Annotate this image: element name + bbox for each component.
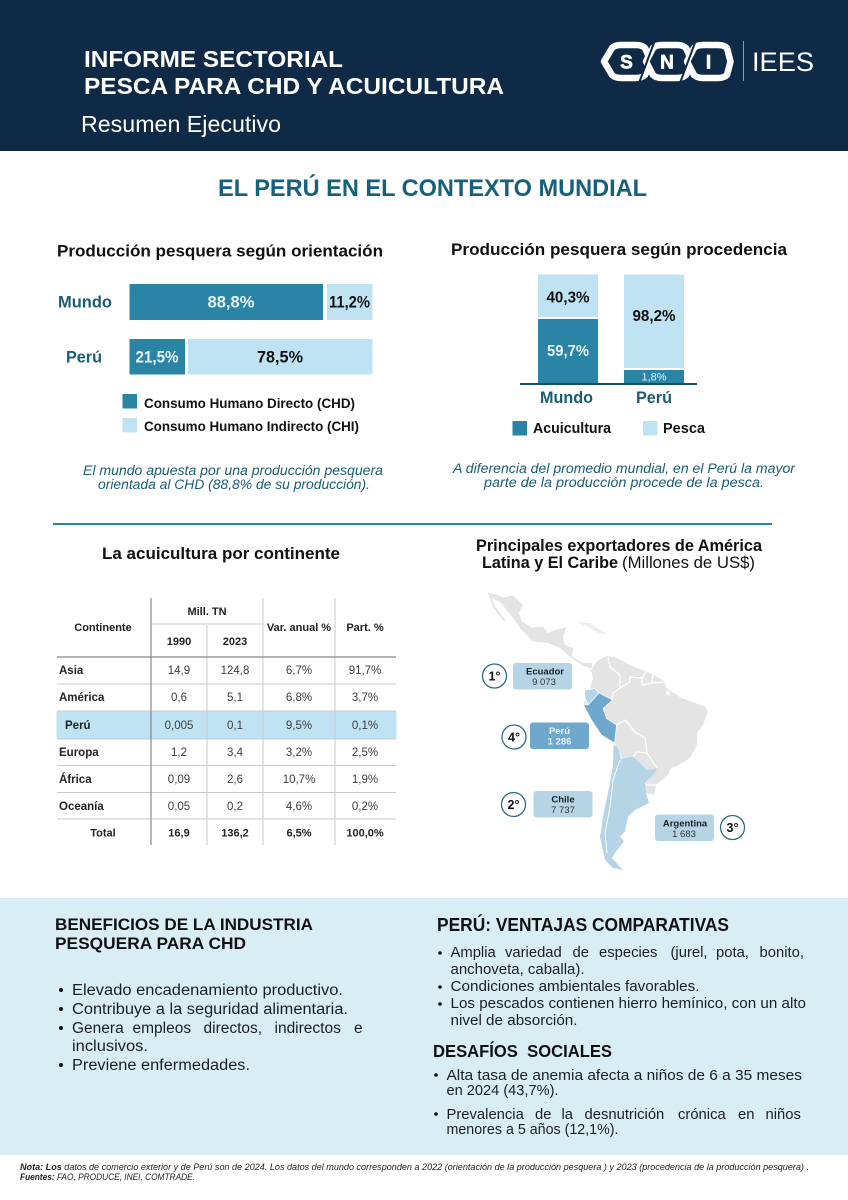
list: comparative advantages: Condiciones ambientales favorables.: [450, 979, 700, 995]
list: benefits: [59, 982, 363, 1074]
logo: SNI IEES: N: [660, 52, 674, 74]
stacked column chart: origin: Mundo: [540, 388, 593, 407]
table: aquaculture: 0,09: [168, 774, 190, 786]
logo: SNI IEES: S: [620, 52, 633, 74]
table: aquaculture: 100,0%: [346, 828, 384, 840]
bar chart: orientation: [58, 284, 372, 374]
map heading: (Millones de US$): [622, 553, 755, 572]
table: aquaculture: 16,9: [168, 828, 190, 840]
legend: origin: Pesca: [663, 421, 706, 437]
callout: Ecuador: Ecuador: [526, 666, 564, 678]
list: social challenges: en 2024 (43,7%).: [446, 1083, 558, 1099]
callout: Perú: [502, 722, 589, 749]
table: aquaculture: África: [59, 773, 92, 786]
list: benefits: Elevado encadenamiento productivo.: [72, 982, 343, 999]
table: aquaculture: Asia: [59, 665, 84, 677]
callout: Chile: 7 737: [551, 805, 575, 816]
legend: orientation: Consumo Humano Directo (CHD): [144, 395, 355, 411]
list: comparative advantages: pota,: [716, 945, 749, 961]
table: aquaculture: 2,5%: [352, 747, 378, 759]
panel: Latin American exporters: [476, 536, 763, 870]
list: social challenges: en: [738, 1107, 754, 1123]
callout: Argentina: [655, 814, 744, 841]
stacked column chart: origin: 59,7%: [547, 343, 589, 360]
table: aquaculture: Mill. TN: [187, 606, 227, 618]
map heading: [476, 536, 763, 572]
list: social challenges: desnutrición: [584, 1107, 664, 1123]
list: social challenges: crónica: [678, 1107, 726, 1123]
map heading: Latina y El Caribe: [482, 553, 618, 572]
table: aquaculture: Total: [90, 828, 116, 840]
table: aquaculture: 3,2%: [286, 747, 312, 759]
legend: orientation: Consumo Humano Indirecto (CHI): [144, 418, 359, 434]
main heading: EL PERÚ EN EL CONTEXTO MUNDIAL: [218, 174, 647, 202]
caption: orientation: [83, 463, 384, 492]
list: comparative advantages: Amplia: [450, 945, 496, 961]
table: aquaculture: 0,2: [227, 801, 243, 813]
heading: comparative advantages: PERÚ: VENTAJAS COMPARATIVAS: [437, 914, 729, 935]
callout: Chile: [502, 791, 592, 818]
caption: orientation: El mundo apuesta por una producción pesquera: [83, 463, 384, 478]
bar chart: orientation: Mundo: [58, 292, 112, 312]
subtitle: Resumen Ejecutivo: [81, 111, 281, 137]
callout: Ecuador: 1°: [489, 670, 500, 684]
table: aquaculture: Var. anual %: [267, 622, 331, 634]
list: comparative advantages: [438, 945, 806, 1029]
legend: origin: [512, 421, 706, 437]
legend: origin: Acuicultura: [533, 421, 612, 437]
caption: orientation: orientada al CHD (88,8% de su producción).: [98, 477, 370, 492]
footnote: Nota: Los datos de comercio exterior y de Perú son de 2024. Los datos del mundo corresponden a 2022 (orientación de la producción pesquera ) y 2023 (procedencia de la producción pesquera) .: [20, 1162, 809, 1172]
table: aquaculture: 124,8: [221, 665, 249, 677]
table: aquaculture: 5,1: [227, 692, 243, 704]
panel: benefits, advantages and challenges: [0, 898, 848, 1155]
callout: Perú: 1 286: [548, 736, 571, 748]
list: comparative advantages: (jurel,: [670, 945, 708, 961]
report title: [84, 46, 504, 99]
logo: SNI IEES: I: [706, 52, 711, 74]
logo: SNI IEES: [604, 40, 814, 83]
stacked column chart: origin: Perú: [636, 388, 672, 407]
panel: production by orientation: [57, 242, 384, 492]
list: benefits: empleos: [132, 1020, 191, 1037]
table: aquaculture: 1990: [167, 636, 191, 648]
table: aquaculture: 0,05: [168, 801, 190, 813]
table: aquaculture: 0,6: [171, 692, 187, 704]
callout: Argentina: 3°: [727, 821, 738, 835]
callout: Ecuador: 9 073: [532, 677, 556, 688]
callout: Argentina: Argentina: [663, 818, 708, 830]
list: comparative advantages: nivel de absorción.: [450, 1013, 578, 1029]
report title: INFORME SECTORIAL: [84, 46, 343, 72]
heading: benefits: BENEFICIOS DE LA INDUSTRIA: [55, 915, 313, 934]
list: comparative advantages: anchoveta, caballa).: [450, 962, 584, 978]
heading: benefits: PESQUERA PARA CHD: [55, 934, 246, 953]
table: aquaculture: 3,7%: [352, 692, 378, 704]
legend: orientation: [122, 394, 359, 434]
list: social challenges: Prevalencia: [446, 1107, 525, 1123]
list: comparative advantages: bonito,: [760, 945, 804, 961]
table: aquaculture: 0,005: [165, 720, 193, 732]
list: benefits: Genera: [72, 1020, 124, 1037]
list: comparative advantages: especies: [599, 945, 657, 961]
list: comparative advantages: Los pescados contienen hierro hemínico, con un alto: [450, 996, 806, 1012]
chart heading: Producción pesquera según procedencia: [451, 240, 788, 259]
table: aquaculture: 6,5%: [286, 828, 312, 840]
callout: Perú: Perú: [549, 726, 570, 737]
table: aquaculture: 3,4: [227, 747, 244, 759]
list: benefits: directos,: [204, 1020, 262, 1037]
footnote: [20, 1162, 809, 1182]
caption: origin: A diferencia del promedio mundial, en el Perú la mayor: [452, 461, 796, 476]
logo: SNI IEES: IEES: [752, 47, 814, 77]
list: comparative advantages: variedad: [505, 945, 562, 961]
table: aquaculture: 0,1%: [352, 720, 378, 732]
table: aquaculture: 2,6: [227, 774, 243, 786]
report title: PESCA PARA CHD Y ACUICULTURA: [84, 73, 504, 99]
chart heading: Producción pesquera según orientación: [57, 242, 383, 260]
table: aquaculture: 0,1: [227, 720, 243, 732]
caption: origin: [452, 461, 796, 490]
heading: social challenges: DESAFÍOS SOCIALES: [433, 1040, 612, 1061]
stacked column chart: origin: [520, 274, 697, 407]
header band: [0, 0, 848, 151]
table: aquaculture: Perú: [65, 720, 91, 732]
heading: benefits: [55, 915, 313, 953]
table: aquaculture: Part. %: [346, 622, 384, 634]
table: aquaculture: 136,2: [221, 828, 249, 840]
footnote: Fuentes: FAO, PRODUCE, INEI, COMTRADE.: [20, 1172, 195, 1182]
table: aquaculture: 9,5%: [286, 720, 312, 732]
table: aquaculture: 1,2: [171, 747, 187, 759]
table: aquaculture: 2023: [223, 636, 247, 648]
list: benefits: e: [354, 1020, 363, 1037]
stacked column chart: origin: 98,2%: [632, 308, 676, 325]
table: aquaculture: 91,7%: [349, 665, 381, 677]
bar chart: orientation: Perú: [66, 348, 102, 366]
table: aquaculture: 4,6%: [286, 801, 312, 813]
table: aquaculture: 1,9%: [352, 774, 378, 786]
table: aquaculture: Continente: [74, 622, 132, 634]
bar chart: orientation: 21,5%: [136, 348, 179, 366]
table heading: La acuicultura por continente: [102, 544, 340, 563]
table: aquaculture: [56, 598, 396, 845]
table: aquaculture: América: [59, 692, 105, 704]
list: comparative advantages: de: [572, 945, 589, 961]
callout: Perú: 4°: [508, 730, 520, 744]
callout: Ecuador: [482, 663, 572, 690]
table: aquaculture: 6,7%: [286, 665, 312, 677]
stacked column chart: origin: 40,3%: [546, 290, 590, 306]
table: aquaculture: 6,8%: [286, 692, 312, 704]
list: social challenges: la: [562, 1107, 574, 1123]
caption: origin: parte de la producción procede de la pesca.: [483, 475, 764, 490]
map heading: Principales exportadores de América: [476, 536, 763, 555]
panel: production by origin: [451, 240, 796, 490]
callout: Argentina: 1 683: [672, 829, 696, 840]
table: aquaculture: Oceanía: [59, 801, 104, 813]
list: social challenges: de: [535, 1107, 551, 1123]
callout: Chile: Chile: [551, 794, 575, 806]
table: aquaculture: 0,2%: [352, 801, 378, 813]
bar chart: orientation: 78,5%: [257, 348, 303, 366]
list: social challenges: [434, 1068, 802, 1138]
map: Latin America: [487, 592, 708, 870]
table: aquaculture: 14,9: [168, 665, 190, 677]
list: social challenges: Alta tasa de anemia afecta a niños de 6 a 35 meses: [446, 1068, 802, 1084]
bar chart: orientation: 88,8%: [208, 294, 255, 312]
bar chart: orientation: 11,2%: [329, 294, 370, 312]
list: benefits: Previene enfermedades.: [72, 1057, 250, 1074]
list: benefits: Contribuye a la seguridad alimentaria.: [72, 1001, 348, 1018]
list: benefits: inclusivos.: [72, 1038, 148, 1055]
table: aquaculture: 10,7%: [283, 774, 315, 786]
panel: aquaculture by continent: [56, 544, 396, 845]
list: social challenges: menores a 5 años (12,1%).: [446, 1122, 618, 1138]
table: aquaculture: Europa: [59, 747, 99, 759]
list: social challenges: niños: [766, 1107, 801, 1123]
callout: Chile: 2°: [508, 798, 519, 812]
list: benefits: indirectos: [274, 1020, 341, 1037]
stacked column chart: origin: 1,8%: [641, 372, 667, 384]
